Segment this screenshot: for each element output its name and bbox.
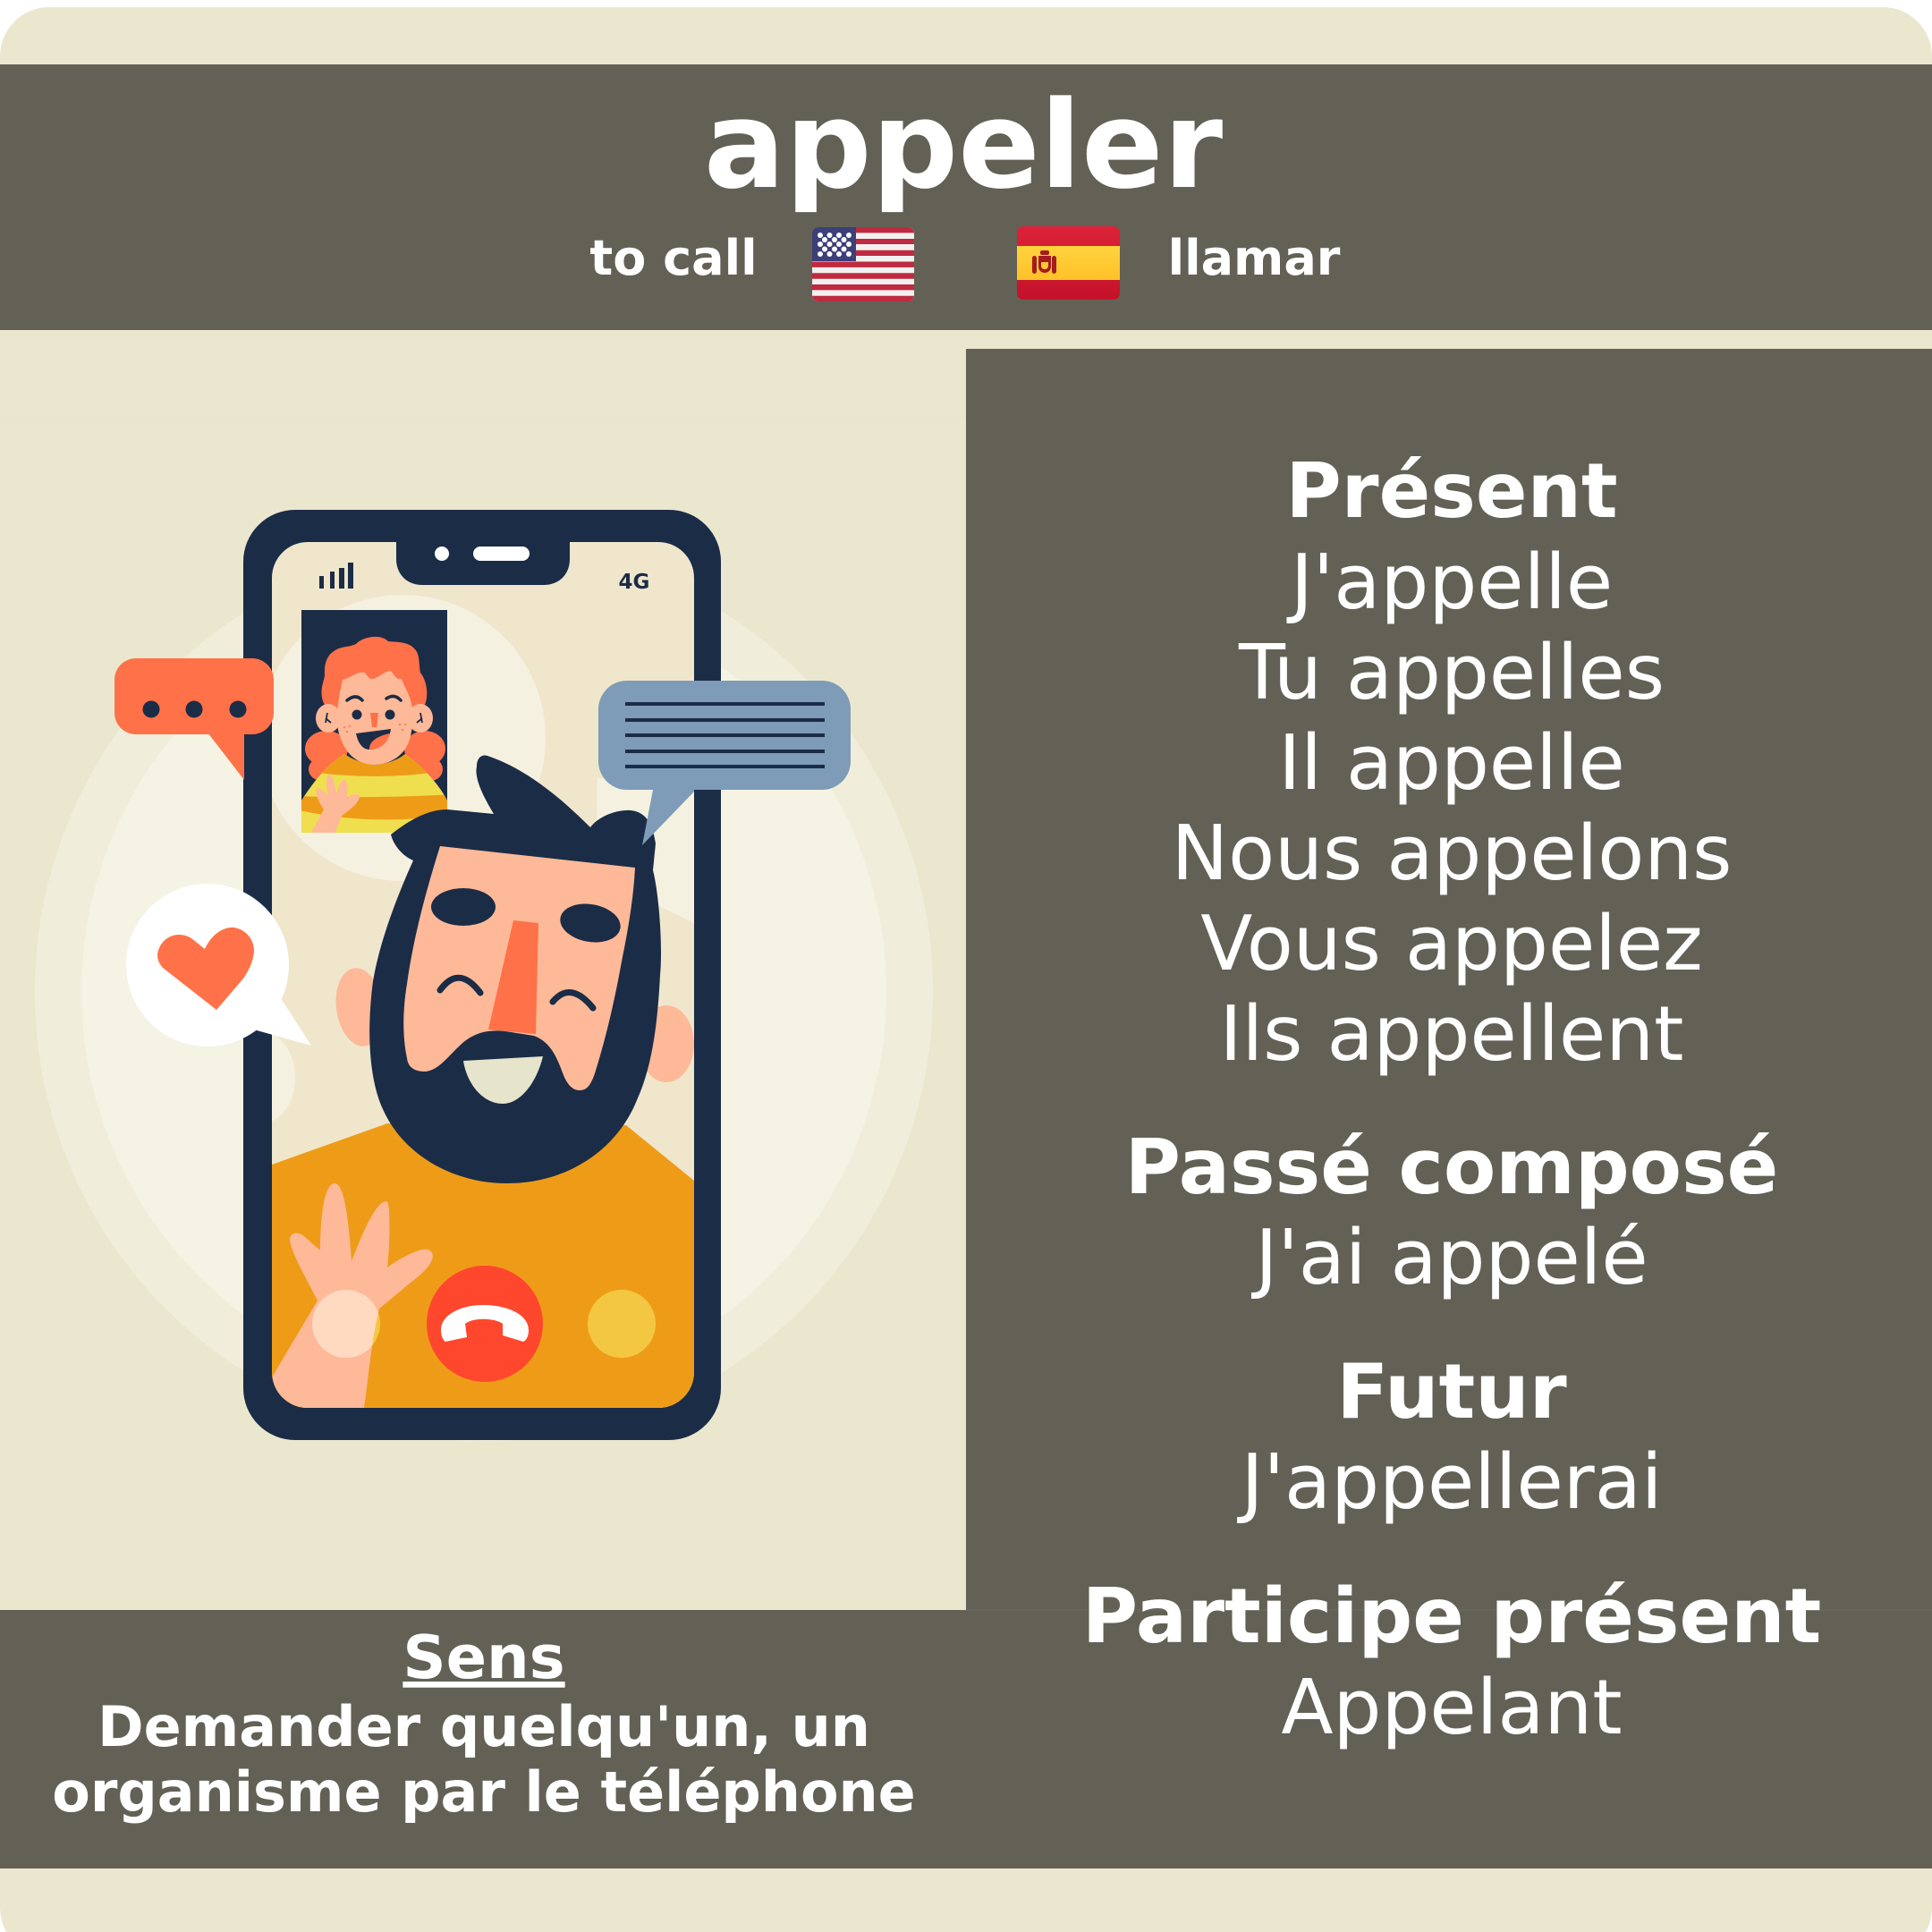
blue speech bubble bbox=[598, 681, 851, 845]
girl lower hair bbox=[305, 731, 445, 781]
white heart bubble bbox=[126, 884, 311, 1046]
phone bbox=[233, 510, 721, 1440]
passe compose: J'ai appelé bbox=[1250, 1214, 1648, 1302]
present tense: Tu appelles bbox=[1238, 629, 1665, 717]
meaning text: organisme par le téléphone bbox=[52, 1759, 916, 1825]
ear marks bbox=[326, 713, 422, 723]
participe present bbox=[1082, 1572, 1821, 1752]
man nose bbox=[488, 920, 538, 1034]
present tense: Il appelle bbox=[1278, 719, 1625, 808]
shirt bbox=[272, 1123, 694, 1408]
man hair and beard bbox=[369, 756, 661, 1183]
red hang-up button bbox=[427, 1266, 543, 1382]
background circles bbox=[35, 543, 933, 1441]
man face bbox=[403, 846, 635, 1090]
futur bbox=[1237, 1348, 1662, 1527]
right button bbox=[588, 1290, 656, 1358]
present tense: Vous appelez bbox=[1200, 900, 1703, 988]
hand bbox=[272, 1183, 433, 1408]
participe present: Participe présent bbox=[1082, 1572, 1821, 1661]
illustration panel bbox=[35, 510, 933, 1441]
girl hair bbox=[321, 637, 427, 716]
present tense: Ils appellent bbox=[1219, 990, 1684, 1079]
present tense: Présent bbox=[1285, 447, 1618, 536]
meaning heading: Sens bbox=[402, 1623, 565, 1692]
man mouth bbox=[463, 1056, 543, 1104]
ears bbox=[336, 968, 374, 1046]
spanish translation: llamar bbox=[1168, 230, 1341, 286]
icon: heart bbox=[157, 928, 254, 1010]
present tense: J'appelle bbox=[1286, 538, 1613, 627]
icon: handset bbox=[441, 1305, 529, 1342]
yellow call button bbox=[372, 1313, 380, 1345]
panel: meaning bbox=[0, 1610, 966, 1868]
girl features bbox=[343, 696, 406, 750]
network label: 4G bbox=[619, 571, 649, 594]
button over hand bbox=[312, 1290, 380, 1358]
man smile lines bbox=[440, 978, 593, 1008]
header band bbox=[0, 64, 1932, 330]
speaker bbox=[473, 547, 530, 561]
present tense bbox=[1172, 447, 1732, 1079]
meaning text: Demander quelqu'un, un bbox=[97, 1694, 870, 1759]
girl shirt bbox=[301, 754, 447, 833]
panel: conjugations bbox=[966, 349, 1932, 1868]
passe compose bbox=[1125, 1123, 1778, 1302]
notch bbox=[396, 537, 570, 585]
icon: Spain flag bbox=[1017, 226, 1120, 300]
phone screen bbox=[233, 542, 694, 1408]
girl hand bbox=[311, 775, 360, 833]
man eyes bbox=[431, 888, 623, 947]
futur: Futur bbox=[1336, 1348, 1567, 1436]
camera bbox=[435, 547, 449, 561]
orange speech bubble bbox=[114, 658, 274, 780]
girl ears bbox=[316, 704, 433, 733]
girl portrait bbox=[295, 610, 456, 833]
present tense: Nous appelons bbox=[1172, 809, 1732, 898]
participe present: Appelant bbox=[1281, 1664, 1623, 1752]
girl face bbox=[337, 671, 413, 765]
futur: J'appellerai bbox=[1237, 1438, 1662, 1527]
icon: US flag bbox=[812, 227, 914, 301]
english translation: to call bbox=[589, 230, 758, 286]
signal bars bbox=[319, 563, 353, 589]
meaning text bbox=[52, 1694, 916, 1825]
passe compose: Passé composé bbox=[1125, 1123, 1778, 1212]
title: appeler bbox=[704, 75, 1224, 216]
